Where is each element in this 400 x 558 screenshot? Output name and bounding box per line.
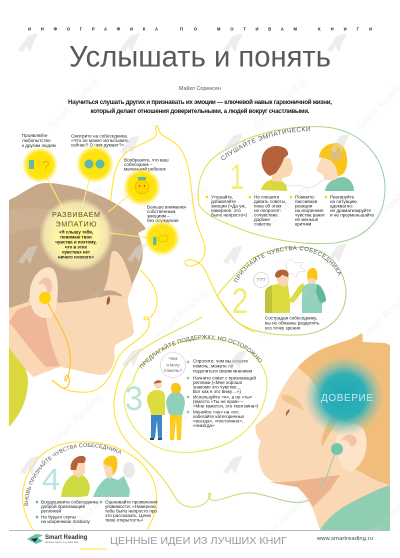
- watermarks: Smart Reading: [256, 182, 311, 237]
- bullets: Вот как я это вижу…»): [193, 389, 241, 394]
- bullets: помочь, можете ли: [193, 364, 234, 368]
- accent line: [80, 548, 107, 550]
- trust glow: ДОВЕРИЕ: [321, 393, 373, 404]
- top label: КНИГИ: [318, 26, 372, 32]
- bullets: знакомо это чувство…: [193, 384, 241, 390]
- person speaking: [316, 143, 354, 191]
- tip: curiosity: любопытство: [22, 138, 51, 143]
- bullets: «всегда», «постоянно»,: [193, 418, 243, 424]
- bullets: на ситуацию: [330, 199, 357, 204]
- earbud: [331, 443, 343, 455]
- speech bubble: помочь?: [164, 368, 182, 373]
- watermarks: Smart Reading: [154, 287, 209, 342]
- centre glow: develop empathy: чувства и поэтому,: [55, 240, 97, 244]
- bullets: твою открытость»: [105, 518, 144, 522]
- tip: curiosity: Проявляйте: [22, 132, 48, 138]
- person: [166, 383, 185, 440]
- tip: little child: собеседник –: [124, 162, 153, 167]
- person right: [93, 456, 130, 497]
- hair highlight: [9, 208, 125, 240]
- person left: [61, 456, 90, 497]
- bullets: Помните:: [295, 194, 315, 200]
- hair: [298, 333, 390, 485]
- tip: own emotions: без осуждения: [147, 218, 179, 223]
- intro text: который делает отношения доверительными, а людей вокруг счастливыми.: [90, 108, 310, 115]
- centre glow: develop empathy: что в этих: [65, 244, 88, 250]
- top label: [28, 26, 372, 32]
- centre glow: develop empathy: ЭМПАТИЮ: [56, 220, 96, 228]
- centre glow: develop empathy: «Я слышу тебя,: [59, 230, 93, 234]
- note: [265, 316, 320, 330]
- panel: step 1 listen empathically: [198, 126, 386, 244]
- note: его точку зрения: [265, 326, 301, 330]
- footer slogan: ЦЕННЫЕ ИДЕИ ИЗ ЛУЧШИХ КНИГ: [110, 535, 287, 547]
- bullets: Реагируйте: [330, 194, 355, 200]
- intro text: Научиться слушать других и признавать их эмоции — ключевой навык гармоничной жизни,: [68, 99, 332, 106]
- tip: little child: Вообразите, что ваш: [124, 158, 169, 162]
- tip: look at the other person: Смотрите на собеседника.: [71, 134, 128, 138]
- bullets: не драматизируйте: [330, 207, 372, 213]
- watermarks: Smart Reading: [49, 392, 104, 447]
- bullets: «никогда»: [193, 423, 215, 428]
- watermarks: Smart Reading: [256, 392, 311, 447]
- question bubble: ???: [256, 278, 266, 284]
- bullets: пассивная: [295, 199, 318, 204]
- number: 2: [232, 282, 248, 321]
- bullets: доброй признающей: [41, 503, 85, 509]
- bullets: было непросто»): [211, 212, 248, 218]
- heading: ПРЕДЛАГАЙТЕ ПОДДЕРЖКУ, НО ОСТОРОЖНО: [140, 335, 262, 369]
- watermarks: Smart Reading: [154, 392, 209, 447]
- tip: curiosity: к другим людям: [22, 143, 56, 148]
- centre glow: develop empathy: РАЗВИВАЕМ: [52, 210, 100, 219]
- comforting man: [265, 270, 305, 313]
- speech bubble: Чем: [169, 356, 177, 361]
- bullets: (вместо «Ты не прав» –: [193, 399, 244, 404]
- panel: step 3 offer support: [124, 335, 268, 453]
- bullets: на искреннюю похвалу: [41, 519, 91, 524]
- tip: own emotions: Больше внимания: [147, 204, 186, 210]
- eyebrow: [282, 395, 304, 411]
- smoke: [123, 462, 135, 478]
- tip: own emotions: [144, 204, 186, 256]
- tip: own emotions: эмоциям –: [147, 214, 170, 218]
- eye: [107, 296, 110, 305]
- bullets: Оценивайте проявления: [105, 498, 158, 504]
- panel: right head trust: [255, 333, 390, 530]
- bullets: Начните совет с признающей: [193, 374, 256, 380]
- bullets: чувства ранит: [295, 212, 326, 218]
- website: www.smartreading.ru: [316, 536, 373, 542]
- bullets: сочувствие: [254, 212, 278, 218]
- bullets: пока об этом: [254, 204, 281, 208]
- cord: [320, 452, 336, 487]
- skin: [9, 252, 134, 377]
- number: 1: [230, 158, 244, 197]
- intro text: [68, 99, 332, 115]
- trust glow: [304, 356, 384, 436]
- earbud: [39, 292, 51, 304]
- speech bubble: [160, 352, 186, 378]
- bullets: поделиться своим мнением: [193, 368, 252, 374]
- collar: [320, 485, 390, 530]
- heading: СЛУШАЙТЕ ЭМПАТИЧЕСКИ: [221, 126, 310, 160]
- connector: main yellow line: [52, 270, 157, 392]
- bullets: Спросите: чем вы можете: [193, 358, 249, 364]
- heading: ВНОВЬ ПРИЗНАЙТЕ ЧУВСТВА СОБЕСЕДНИКА: [24, 443, 121, 506]
- connector: top loop line: [110, 126, 255, 332]
- neck shadow: [9, 300, 60, 367]
- panel: left head: [9, 183, 146, 427]
- watermarks: Smart Reading: [154, 182, 209, 237]
- bullets: на искренние: [295, 208, 324, 213]
- heading: ПРИЗНАЙТЕ ЧУВСТВА СОБЕСЕДНИКА: [234, 246, 342, 282]
- top label: МОТИВАМ: [217, 26, 298, 32]
- tip: look at the other person: «Что он может испытывать: [71, 138, 129, 143]
- bullets: Меняйте «ну» на «я»;: [193, 408, 239, 414]
- bullets: Не спешите: [254, 194, 280, 200]
- bullets: критики: [295, 222, 312, 226]
- bullets: Не будьте скупы: [41, 514, 76, 520]
- bullets: Утешайте,: [211, 194, 233, 200]
- person listening: [261, 146, 293, 191]
- watermarks: Smart Reading: [252, 77, 307, 132]
- logo: Ценные идеи из лучших книг: [45, 541, 79, 544]
- bullets: реплики («Мне хорошо: [193, 380, 243, 385]
- sound wire: [283, 174, 328, 188]
- number: 4: [42, 462, 60, 497]
- centre glow: develop empathy: ничего плохого»: [58, 254, 94, 260]
- bullets: избегайте категоричных: [193, 413, 245, 419]
- bullets: наверное, это: [211, 208, 241, 213]
- white footer mask: [0, 530, 400, 558]
- upset person: [302, 268, 326, 313]
- man: [147, 380, 165, 440]
- bullets: дороже: [254, 217, 270, 222]
- bullets: не попросят:: [254, 208, 281, 213]
- panel: step 2 acknowledge feelings: [216, 246, 346, 336]
- tip: look at the other person: сейчас? О чем думает?»: [71, 142, 124, 148]
- tip: curiosity: ?: [42, 158, 50, 173]
- bullets: эмоции («Да уж,: [211, 204, 246, 208]
- neck shirt: [9, 347, 28, 427]
- bullets: репликой: [41, 508, 61, 514]
- bullets: давать советы,: [254, 199, 286, 204]
- centre glow: develop empathy: [39, 198, 113, 272]
- bullets: адекватно:: [330, 204, 353, 208]
- centre glow: develop empathy: чувствах нет: [62, 250, 91, 254]
- top label: ИНФОГРАФИКА: [28, 26, 158, 32]
- bullets: тебе было непросто про: [105, 508, 157, 514]
- bullets: советов: [254, 222, 271, 226]
- tip: look at the other person: [71, 134, 129, 183]
- watermarks: Smart Reading: [49, 182, 104, 237]
- burst bubble: [284, 259, 306, 278]
- bullets: «Мне кажется, это твоя вина»): [193, 404, 259, 408]
- bullets: уязвимости: «Наверное,: [105, 504, 157, 509]
- bullets: это рассказать. Ценю: [105, 513, 152, 518]
- eye: [286, 409, 290, 416]
- speech bubble: я могу: [166, 362, 180, 368]
- logo: [27, 534, 88, 544]
- watermarks: Smart Reading: [256, 287, 311, 342]
- bullets: реакция: [295, 204, 313, 208]
- top label: ПО: [180, 26, 198, 32]
- watermarks: Smart Reading: [54, 492, 109, 547]
- watermarks: Smart Reading: [49, 287, 104, 342]
- note: Сострадая собеседнику,: [265, 316, 317, 320]
- note: вы не обязаны разделять: [265, 320, 320, 326]
- bullets: Используйте «я», а не «ты»: [193, 394, 253, 400]
- tip: curiosity: [22, 132, 58, 183]
- neck shadow: [267, 475, 340, 507]
- title: Услышать и понять: [69, 40, 331, 74]
- bullets: не меньше: [295, 217, 319, 222]
- watermarks: Smart Reading: [256, 492, 311, 547]
- bullets: добавляйте: [211, 198, 236, 204]
- bullets: [36, 498, 158, 524]
- eyebrow: [100, 291, 122, 297]
- footer rule: [9, 529, 390, 532]
- ear: [335, 424, 367, 472]
- author: Майкл Соренсен: [179, 85, 221, 92]
- watermarks: Smart Reading: [46, 77, 101, 132]
- ear: [30, 267, 58, 318]
- hair: [9, 183, 146, 308]
- connector: lines to bubble 3: [114, 317, 333, 507]
- tip: little child: [123, 158, 169, 206]
- bullets: и не преуменьшайте: [330, 212, 375, 218]
- centre glow: develop empathy: понимаю твои: [60, 234, 92, 240]
- bullets: [206, 194, 375, 226]
- watermarks: Smart Reading: [149, 77, 204, 132]
- skin: [255, 360, 390, 530]
- logo: Smart Reading: [45, 535, 88, 541]
- bullets: [187, 358, 259, 428]
- rays from centre: [47, 177, 150, 238]
- panel: step 4 re-acknowledge: [22, 441, 158, 530]
- number: 3: [125, 380, 143, 418]
- tip: own emotions: собственным: [147, 209, 175, 214]
- tip: little child: маленький ребенок: [124, 166, 167, 172]
- bullets: Воодушевите собеседника: [41, 500, 99, 504]
